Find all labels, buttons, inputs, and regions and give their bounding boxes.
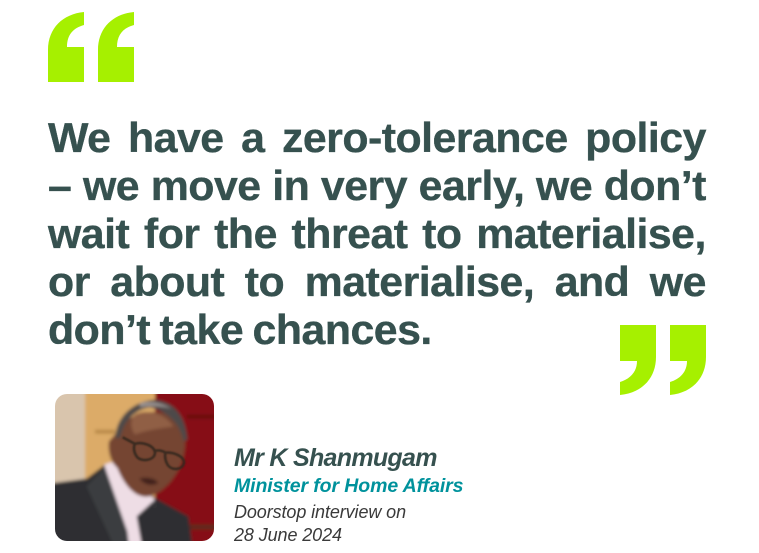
speaker name: Mr K Shanmugam xyxy=(234,444,437,472)
icon: opening quotation mark xyxy=(48,12,134,82)
quote text: don’t take chances. xyxy=(48,306,432,352)
photo: portrait of Mr K Shanmugam xyxy=(55,394,214,541)
quote text xyxy=(48,114,706,352)
quote text: or about to materialise, and we xyxy=(48,258,706,304)
attribution text xyxy=(234,444,463,545)
speaker role: Minister for Home Affairs xyxy=(234,475,463,497)
source line 1: Doorstop interview on xyxy=(234,502,406,522)
quote text: We have a zero-tolerance policy xyxy=(48,114,706,160)
quote text: wait for the threat to materialise, xyxy=(48,210,706,256)
icon: closing quotation mark xyxy=(620,325,706,395)
quote text: – we move in very early, we don’t xyxy=(48,162,706,208)
source line 2: 28 June 2024 xyxy=(234,525,342,545)
